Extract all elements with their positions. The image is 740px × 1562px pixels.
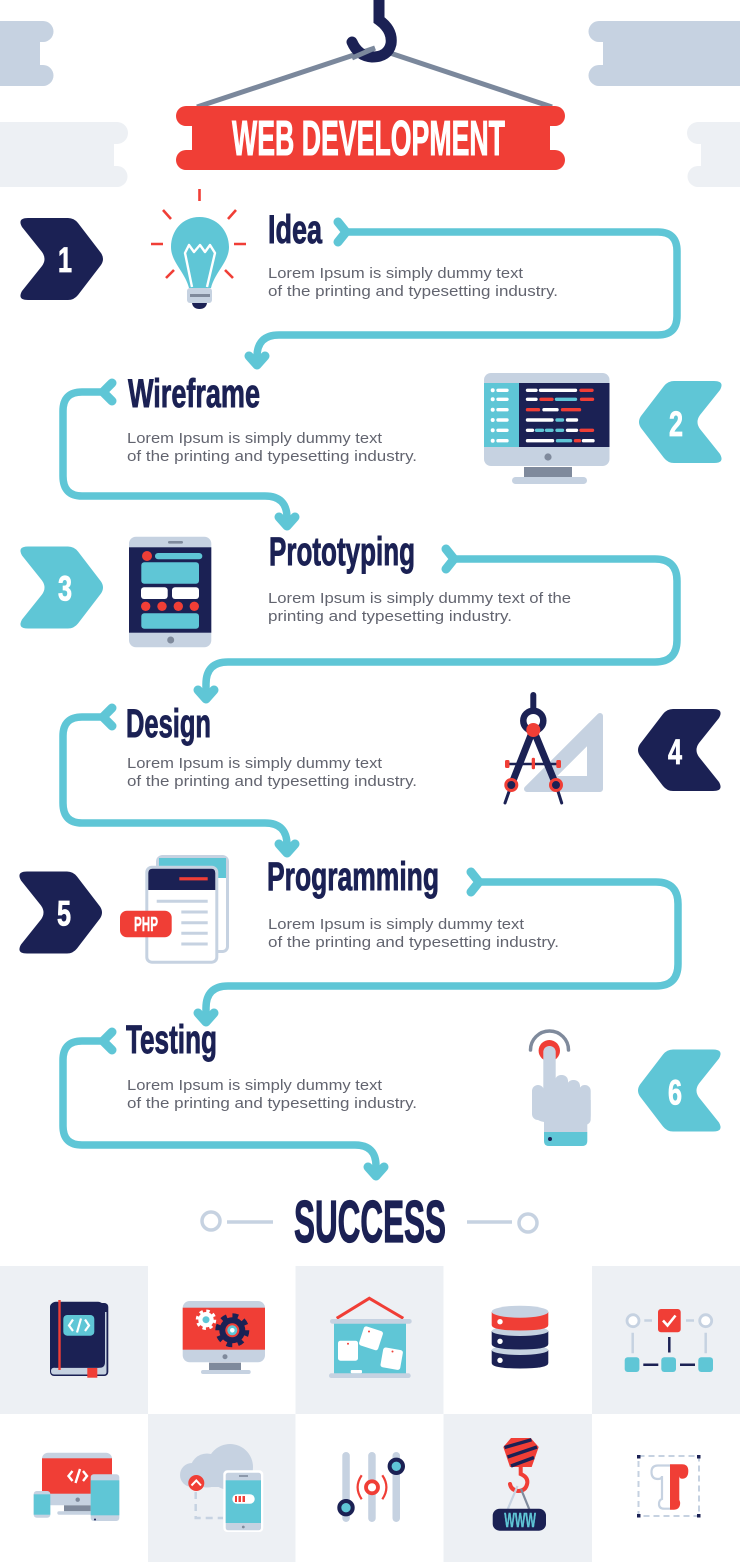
step 1: idea — [20, 189, 677, 365]
sign board — [176, 106, 565, 170]
success text: SUCCESS — [294, 1189, 446, 1255]
ropes — [197, 48, 552, 107]
body text: of the printing and typesetting industry. — [268, 283, 558, 300]
icon: monitor with gears — [183, 1301, 265, 1374]
arrow path — [198, 872, 678, 1022]
heading: Wireframe — [128, 372, 260, 416]
success heading — [202, 1189, 537, 1255]
body text: Lorem Ipsum is simply dummy text — [127, 430, 383, 447]
icon: tablet wireframe — [129, 537, 211, 647]
chevron 5: 5 — [57, 894, 71, 934]
heading: Testing — [126, 1018, 217, 1062]
heading: Programming — [267, 855, 439, 899]
icon: pointing hand — [530, 1031, 591, 1146]
heading: Prototyping — [269, 530, 415, 574]
heading: Idea — [268, 208, 323, 252]
title sign with hook — [176, 0, 565, 170]
arrow path — [198, 549, 677, 699]
hook — [352, 0, 391, 57]
chevron 6 — [638, 1050, 721, 1132]
front rope — [352, 48, 375, 58]
step 2: wireframe — [63, 372, 722, 526]
body text: Lorem Ipsum is simply dummy text — [268, 916, 525, 933]
body text: of the printing and typesetting industry. — [127, 1095, 417, 1112]
arrow path — [63, 708, 295, 853]
chevron 6: 6 — [668, 1074, 682, 1112]
body text: of the printing and typesetting industry. — [127, 448, 417, 465]
icon: flow structure — [625, 1309, 713, 1372]
step 6: testing — [63, 1018, 721, 1176]
icon: type tool — [637, 1455, 700, 1518]
body text: of the printing and typesetting industry. — [268, 934, 559, 951]
chevron 1 — [20, 218, 103, 300]
icon: cloud and phone — [180, 1444, 263, 1532]
icon: php documents: PHP — [134, 914, 158, 936]
icon: compass and set square — [505, 695, 600, 803]
arrow path — [63, 383, 295, 526]
chevron 2: 2 — [669, 405, 683, 444]
icon: code monitor — [484, 373, 610, 484]
step 3: prototyping — [20, 530, 677, 699]
chevron 4 — [638, 709, 721, 791]
icon grid backgrounds — [0, 1266, 740, 1562]
title: WEB DEVELOPMENT — [232, 112, 505, 166]
body text: Lorem Ipsum is simply dummy text — [127, 1077, 383, 1094]
step 4: design — [63, 695, 721, 853]
icon: code book — [50, 1300, 108, 1378]
step 5: programming — [19, 855, 678, 1022]
icon: crane hook with www sign — [493, 1438, 546, 1532]
icon: crane hook with www sign: WWW — [504, 1510, 536, 1532]
chevron 1: 1 — [58, 241, 72, 280]
icon: responsive devices — [34, 1453, 119, 1521]
arrow path — [63, 1032, 384, 1176]
chevron 4: 4 — [668, 733, 682, 772]
chevron 5 — [19, 872, 102, 954]
chevron 3: 3 — [58, 570, 72, 608]
body text: printing and typesetting industry. — [268, 608, 512, 625]
icon: light bulb — [151, 189, 246, 309]
icon: pin board — [329, 1298, 412, 1378]
arrow path — [249, 222, 677, 365]
chevron 3 — [20, 546, 103, 628]
icon: database — [492, 1306, 548, 1368]
body text: Lorem Ipsum is simply dummy text — [127, 755, 383, 772]
heading: Design — [126, 702, 211, 746]
left connector — [202, 1212, 273, 1230]
chevron 2 — [639, 381, 722, 463]
body text: Lorem Ipsum is simply dummy text — [268, 265, 524, 282]
background planks — [0, 21, 740, 187]
body text: of the printing and typesetting industry. — [127, 773, 417, 790]
icon: sliders — [339, 1452, 403, 1522]
body text: Lorem Ipsum is simply dummy text of the — [268, 590, 571, 607]
right connector — [467, 1214, 537, 1232]
icon: php documents — [120, 856, 228, 962]
